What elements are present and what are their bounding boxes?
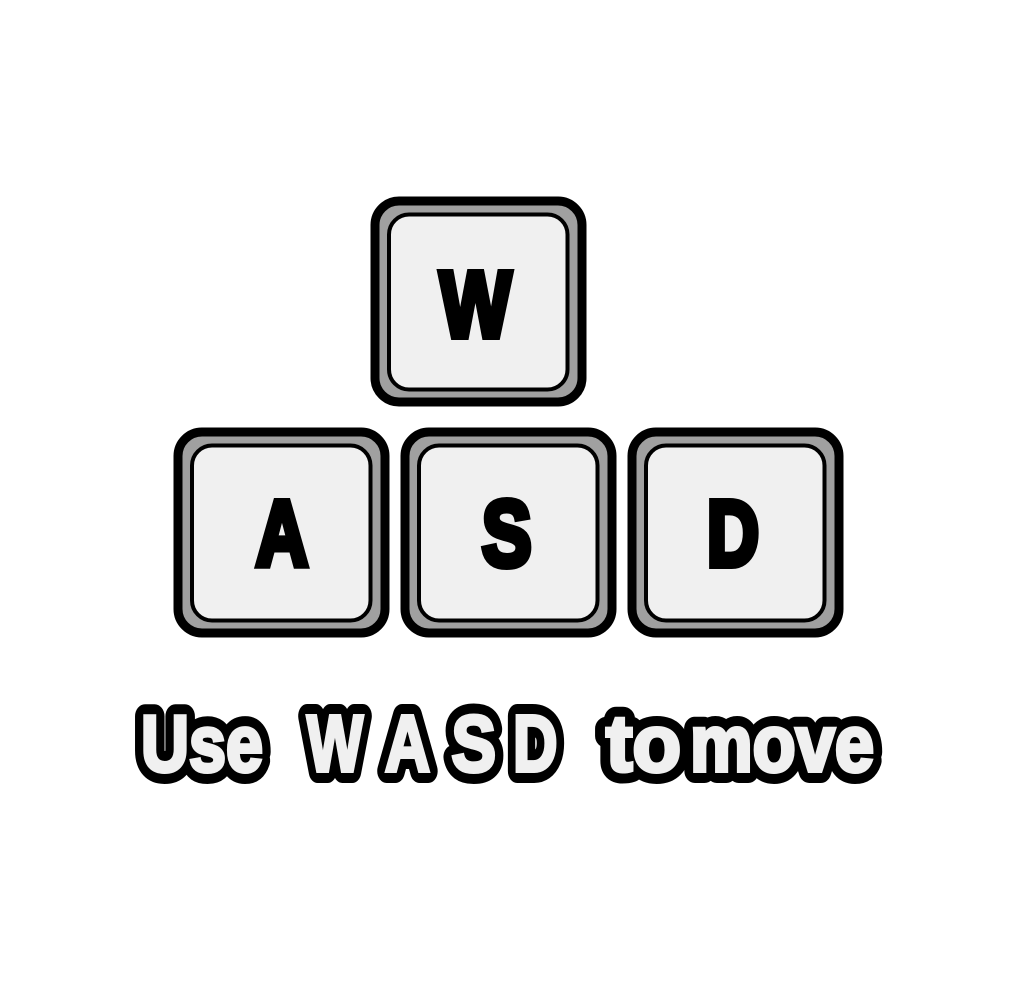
caption: Use WASD to move: S bbox=[452, 699, 496, 788]
caption: Use WASD to move: A bbox=[385, 699, 430, 788]
caption: Use WASD to move: move bbox=[690, 699, 874, 788]
key: S: S bbox=[482, 482, 532, 586]
caption: Use WASD to move: D bbox=[513, 699, 558, 788]
key: W: W bbox=[440, 252, 511, 356]
caption: Use WASD to move: move bbox=[690, 699, 874, 788]
key: S bbox=[405, 432, 612, 633]
caption: Use WASD to move: D bbox=[513, 699, 558, 788]
caption: Use WASD to move: A bbox=[385, 699, 430, 788]
caption: Use WASD to move: to bbox=[606, 699, 681, 788]
key: D bbox=[632, 432, 839, 633]
key: W bbox=[375, 201, 582, 402]
caption: Use WASD to move: Use bbox=[141, 699, 263, 788]
caption: Use WASD to move: W bbox=[307, 699, 363, 788]
key: D: D bbox=[707, 482, 759, 586]
key: A: A bbox=[256, 482, 308, 586]
caption: Use WASD to move: S bbox=[452, 699, 496, 788]
caption: Use WASD to move: Use bbox=[141, 699, 263, 788]
key: A bbox=[178, 432, 385, 633]
caption: Use WASD to move: to bbox=[606, 699, 681, 788]
caption: Use WASD to move: W bbox=[307, 699, 363, 788]
caption: Use WASD to move bbox=[141, 699, 874, 788]
